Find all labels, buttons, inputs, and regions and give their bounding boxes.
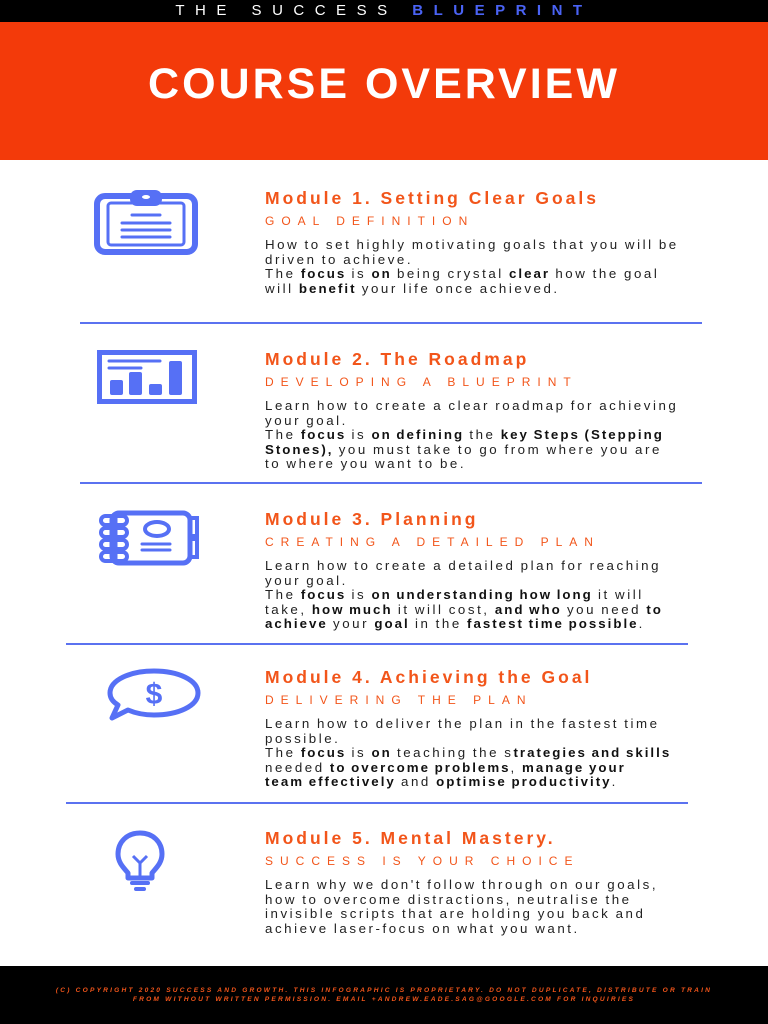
footer: [0, 966, 768, 1024]
module 4: The focus is on teaching the strategies and skills: [265, 745, 671, 760]
module 2: Learn how to create a clear roadmap for achieving: [265, 398, 678, 413]
module 5: Learn why we don't follow through on our goals,: [265, 877, 658, 892]
module 4: Module 4. Achieving the Goal: [265, 667, 592, 687]
module 4: possible.: [265, 731, 340, 746]
module 1: How to set highly motivating goals that you will be: [265, 237, 679, 252]
icon: dollar speech bubble: [108, 668, 200, 720]
icon: planner: [99, 510, 199, 566]
module 5: invisible scripts that are holding you back and: [265, 906, 645, 921]
module 1: The focus is on being crystal clear how the goal: [265, 266, 659, 281]
module 1: driven to achieve.: [265, 252, 413, 267]
module 4: team effectively and optimise productivity.: [265, 774, 618, 789]
module 3: Module 3. Planning: [265, 509, 478, 529]
icon: chart board: [97, 350, 197, 404]
module 1: [265, 188, 679, 296]
module 2: to where you want to be.: [265, 456, 466, 471]
icon: dollar speech bubble: $: [146, 678, 163, 711]
module 5: Module 5. Mental Mastery.: [265, 828, 556, 848]
top bar: [0, 0, 768, 22]
footer: FROM WITHOUT WRITTEN PERMISSION. EMAIL +ANDREW.EADE.SAG@GOOGLE.COM FOR INQUIRIES: [133, 996, 635, 1003]
header banner: [0, 22, 768, 160]
module 2: Module 2. The Roadmap: [265, 349, 529, 369]
module 2: your goal.: [265, 413, 348, 428]
header banner: COURSE OVERVIEW: [148, 60, 620, 108]
module 3: Learn how to create a detailed plan for reaching: [265, 558, 661, 573]
module 2: The focus is on defining the key Steps (Stepping: [265, 427, 664, 442]
module 4: needed to overcome problems, manage your: [265, 760, 626, 775]
module 2: Stones), you must take to go from where you are: [265, 442, 662, 457]
module 1: GOAL DEFINITION: [265, 214, 474, 228]
footer: (C) COPYRIGHT 2020 SUCCESS AND GROWTH. THIS INFOGRAPHIC IS PROPRIETARY. DO NOT DUPLICATE, DISTRIBUTE OR TRAIN: [56, 987, 712, 994]
module 5: achieve laser-focus on what you want.: [265, 921, 580, 936]
module 3: The focus is on understanding how long it will: [265, 587, 644, 602]
module 5: how to overcome distractions, neutralise the: [265, 892, 632, 907]
module 1: Module 1. Setting Clear Goals: [265, 188, 599, 208]
module 4: DELIVERING THE PLAN: [265, 693, 532, 707]
icon: clipboard: [94, 190, 198, 255]
module 1: will benefit your life once achieved.: [265, 281, 560, 296]
module 3: your goal.: [265, 573, 348, 588]
module 2: [265, 349, 678, 471]
module 4: [265, 667, 671, 789]
module 3: take, how much it will cost, and who you need to: [265, 602, 663, 617]
module 4: Learn how to deliver the plan in the fastest time: [265, 716, 660, 731]
module 3: CREATING A DETAILED PLAN: [265, 535, 600, 549]
module 2: DEVELOPING A BLUEPRINT: [265, 375, 578, 389]
module 5: [265, 828, 658, 936]
module 3: [265, 509, 663, 631]
icon: light bulb: [116, 830, 164, 891]
top bar: THE SUCCESS BLUEPRINT: [175, 2, 593, 19]
module 5: SUCCESS IS YOUR CHOICE: [265, 854, 579, 868]
module 3: achieve your goal in the fastest time possible.: [265, 616, 645, 631]
